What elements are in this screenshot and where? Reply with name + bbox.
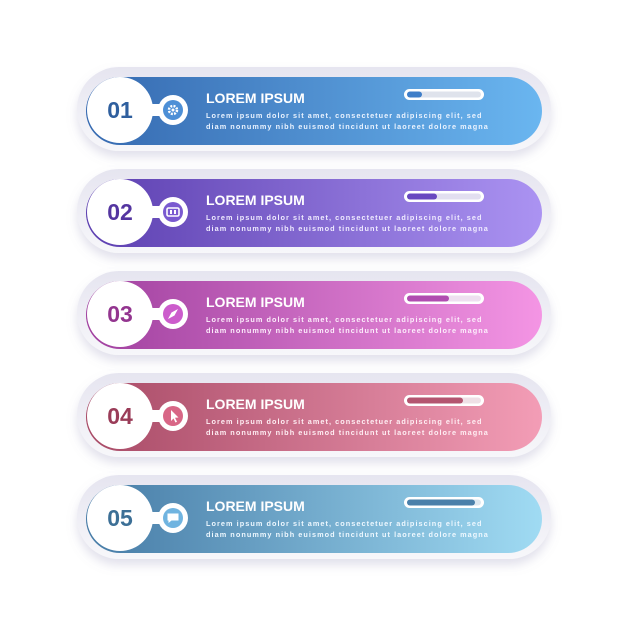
number badge xyxy=(87,179,188,245)
body text xyxy=(206,519,489,539)
progress bar xyxy=(404,89,484,100)
progress bar xyxy=(404,293,484,304)
number badge xyxy=(87,383,188,449)
colored bar xyxy=(86,281,542,349)
colored bar xyxy=(86,179,542,247)
outer pill xyxy=(77,475,551,559)
progress bar xyxy=(404,395,484,406)
body text: Lorem ipsum dolor sit amet, consectetuer adipiscing elit, sed xyxy=(206,519,483,528)
row 4 xyxy=(77,373,551,457)
heading: LOREM IPSUM xyxy=(206,294,305,310)
heading: LOREM IPSUM xyxy=(206,90,305,106)
outer pill xyxy=(77,271,551,355)
number badge xyxy=(87,485,188,551)
body text: Lorem ipsum dolor sit amet, consectetuer adipiscing elit, sed xyxy=(206,111,483,120)
colored bar xyxy=(86,383,542,451)
number badge xyxy=(87,77,188,143)
number badge xyxy=(87,281,188,347)
body text: diam nonummy nibh euismod tincidunt ut laoreet dolore magna xyxy=(206,122,489,131)
icon: battery xyxy=(167,208,179,216)
body text: diam nonummy nibh euismod tincidunt ut laoreet dolore magna xyxy=(206,326,489,335)
body text: diam nonummy nibh euismod tincidunt ut laoreet dolore magna xyxy=(206,224,489,233)
number badge: 03 xyxy=(107,301,133,327)
body text: diam nonummy nibh euismod tincidunt ut laoreet dolore magna xyxy=(206,428,489,437)
progress bar xyxy=(404,497,484,508)
row 5 xyxy=(77,475,551,559)
icon: chat xyxy=(168,514,178,523)
icon: compass xyxy=(168,309,178,319)
number badge: 02 xyxy=(107,199,133,225)
heading: LOREM IPSUM xyxy=(206,396,305,412)
number badge: 05 xyxy=(107,505,133,531)
colored bar xyxy=(86,77,542,145)
row 2 xyxy=(77,169,551,253)
progress bar xyxy=(404,191,484,202)
body text: diam nonummy nibh euismod tincidunt ut laoreet dolore magna xyxy=(206,530,489,539)
row 3 xyxy=(77,271,551,355)
body text xyxy=(206,111,489,131)
body text xyxy=(206,315,489,335)
icon: cursor xyxy=(171,410,178,422)
row 1 xyxy=(77,67,551,151)
body text: Lorem ipsum dolor sit amet, consectetuer adipiscing elit, sed xyxy=(206,213,483,222)
number badge: 04 xyxy=(107,403,133,429)
number badge: 01 xyxy=(107,97,133,123)
icon: gear xyxy=(169,106,177,114)
outer pill xyxy=(77,67,551,151)
outer pill xyxy=(77,169,551,253)
heading: LOREM IPSUM xyxy=(206,192,305,208)
body text xyxy=(206,213,489,233)
body text: Lorem ipsum dolor sit amet, consectetuer adipiscing elit, sed xyxy=(206,315,483,324)
heading: LOREM IPSUM xyxy=(206,498,305,514)
body text: Lorem ipsum dolor sit amet, consectetuer adipiscing elit, sed xyxy=(206,417,483,426)
outer pill xyxy=(77,373,551,457)
body text xyxy=(206,417,489,437)
colored bar xyxy=(86,485,542,553)
